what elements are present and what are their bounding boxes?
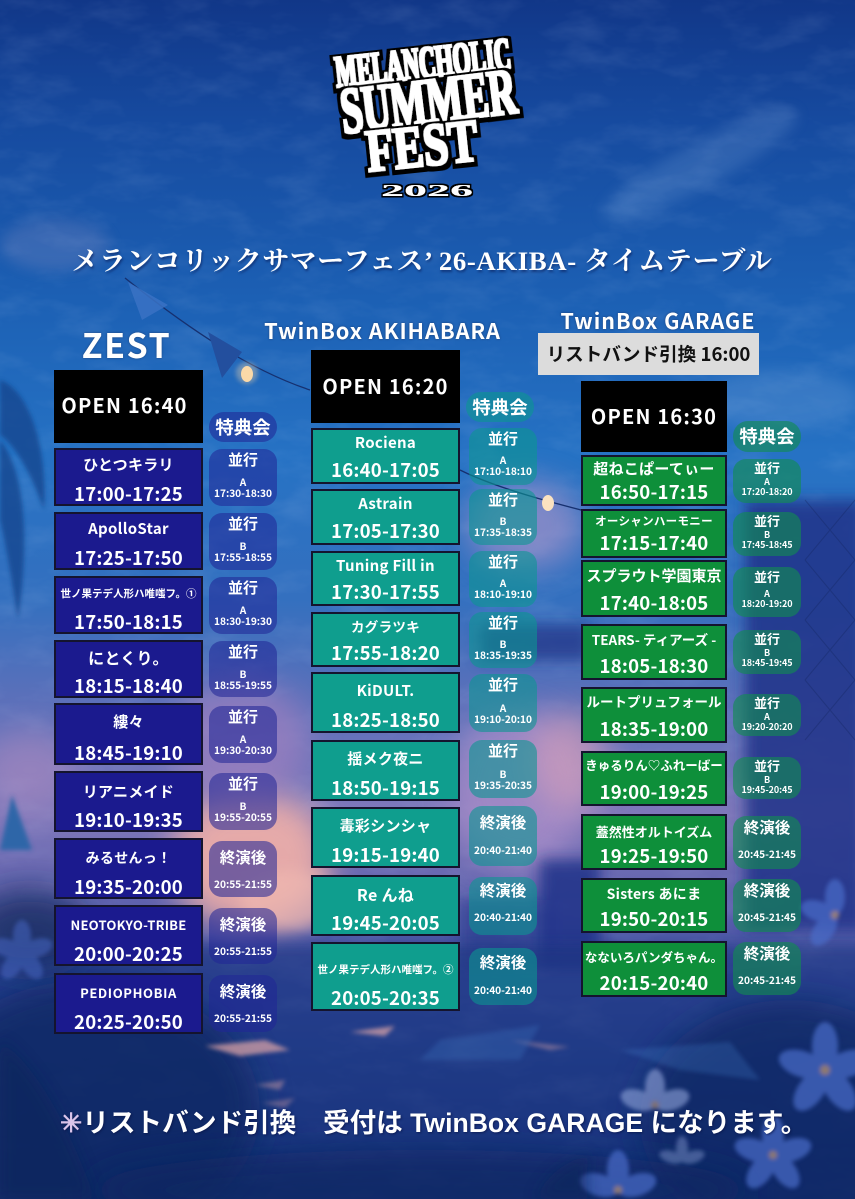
- act: リアニメイド: 19:10-19:35: [74, 806, 183, 833]
- slot: きゅるりん♡ふれーばー benefit: B: [764, 773, 770, 786]
- slot: 毒彩シンシャ benefit: 終演後: [480, 811, 526, 833]
- act: PEDIOPHOBIA: [54, 973, 203, 1034]
- act: Sisters あにま: [581, 878, 727, 933]
- act: Tuning Fill in: 17:30-17:55: [331, 578, 440, 605]
- slot: にとくり。 benefit: 並行: [228, 641, 258, 662]
- ZEST open time: OPEN 16:40: [61, 390, 188, 419]
- slot: スプラウト学園東京 benefit: A: [764, 587, 770, 600]
- act: 超ねこぱーてぃー: [581, 455, 727, 506]
- slot: Re んね benefit: 終演後: [480, 879, 526, 901]
- act: きゅるりん♡ふれーばー: [581, 751, 727, 806]
- slot: ApolloStar benefit: B: [240, 538, 246, 553]
- panel: ZEST timetable: [54, 370, 277, 1035]
- act: 毒彩シンシャ: 毒彩シンシャ: [340, 815, 431, 836]
- dark foliage: [0, 1040, 590, 1199]
- slot: みるせんっ！ benefit: 20:55-21:55: [214, 876, 272, 891]
- palm silhouette: [0, 380, 45, 620]
- act: 世ノ果テデ人形ハ唯嗤フ。①: 17:50-18:15: [74, 608, 183, 635]
- slot: 世ノ果テデ人形ハ唯嗤フ。① benefit: 並行: [228, 577, 258, 598]
- pale clouds: [0, 94, 855, 430]
- slot: TEARS- ティアーズ - benefit: [733, 630, 801, 674]
- slot: なないろパンダちゃん。 benefit: 終演後: [744, 942, 790, 964]
- act: カグラツキ: カグラツキ: [351, 616, 420, 636]
- slot: ApolloStar benefit: 17:55-18:55: [214, 549, 272, 564]
- slot: TEARS- ティアーズ - benefit: 18:45-19:45: [741, 656, 793, 669]
- slot: みるせんっ！ benefit: [209, 841, 277, 897]
- slot: 毒彩シンシャ benefit: [469, 806, 537, 866]
- act: ひとつキラリ: ひとつキラリ: [83, 454, 174, 475]
- act: にとくり。: にとくり。: [88, 645, 169, 669]
- act: Sisters あにま: Sisters あにま: [607, 884, 701, 904]
- slot: ApolloStar benefit: 並行: [228, 513, 258, 534]
- slot: Sisters あにま benefit: 20:45-21:45: [738, 909, 796, 924]
- slot: オーシャンハーモニー benefit: 並行: [754, 511, 780, 530]
- slot: NEOTOKYO-TRIBE benefit: [209, 908, 277, 964]
- slot: Rociena benefit: [469, 428, 537, 485]
- act: NEOTOKYO-TRIBE: NEOTOKYO-TRIBE: [71, 915, 186, 934]
- slot: Re んね benefit: [469, 877, 537, 935]
- act: 毒彩シンシャ: 19:15-19:40: [331, 841, 440, 868]
- string lights and pennants: [125, 278, 640, 525]
- flowers: [0, 879, 855, 1199]
- slot: きゅるりん♡ふれーばー benefit: 並行: [754, 756, 780, 775]
- slot: 世ノ果テデ人形ハ唯嗤フ。② benefit: [469, 948, 537, 1005]
- act: 揺メク夜ニ: 揺メク夜ニ: [347, 748, 424, 769]
- tent: [0, 795, 32, 850]
- slot: Astrain benefit: B: [500, 513, 506, 528]
- slot: 超ねこぱーてぃー benefit: [733, 459, 801, 503]
- slot: NEOTOKYO-TRIBE benefit: 20:55-21:55: [214, 943, 272, 958]
- slot: ひとつキラリ benefit: 並行: [228, 449, 258, 470]
- slot: 蓋然性オルトイズム benefit: 終演後: [744, 816, 790, 838]
- slot: カグラツキ benefit: 並行: [488, 612, 518, 633]
- slot: ApolloStar benefit: [209, 513, 277, 570]
- stage structure: [460, 500, 855, 970]
- slot: オーシャンハーモニー benefit: [733, 512, 801, 556]
- slot: Tuning Fill in benefit: A: [500, 575, 506, 590]
- act: 世ノ果テデ人形ハ唯嗤フ。①: 世ノ果テデ人形ハ唯嗤フ。①: [60, 586, 197, 601]
- slot: 世ノ果テデ人形ハ唯嗤フ。① benefit: [209, 577, 277, 634]
- slot: なないろパンダちゃん。 benefit: 20:45-21:45: [738, 972, 796, 987]
- slot: オーシャンハーモニー benefit: B: [764, 528, 770, 541]
- slot: 超ねこぱーてぃー benefit: 17:20-18:20: [741, 485, 793, 498]
- slot: Astrain benefit: [469, 489, 537, 545]
- AKIHABARA benefit header: 特典会: [472, 394, 528, 420]
- act: 世ノ果テデ人形ハ唯嗤フ。①: [54, 576, 203, 634]
- slot: 超ねこぱーてぃー benefit: A: [764, 475, 770, 488]
- act: Rociena: Rociena: [355, 432, 416, 453]
- slot: にとくり。 benefit: B: [240, 666, 246, 681]
- slot: Astrain benefit: 並行: [488, 489, 518, 510]
- slot: TEARS- ティアーズ - benefit: B: [764, 646, 770, 659]
- act: 超ねこぱーてぃー: 超ねこぱーてぃー: [593, 458, 715, 479]
- act: TEARS- ティアーズ -: [581, 624, 727, 680]
- act: 世ノ果テデ人形ハ唯嗤フ。②: 世ノ果テデ人形ハ唯嗤フ。②: [317, 962, 454, 977]
- act: Re んね: Re んね: [357, 882, 414, 906]
- act: 世ノ果テデ人形ハ唯嗤フ。②: 20:05-20:35: [331, 984, 440, 1011]
- act: 縷々: 18:45-19:10: [74, 739, 183, 766]
- GARAGE benefit header: [733, 421, 801, 452]
- slot: みるせんっ！ benefit: 終演後: [220, 846, 266, 868]
- slot: 揺メク夜ニ benefit: 並行: [488, 740, 518, 761]
- act: ひとつキラリ: 17:00-17:25: [74, 480, 183, 507]
- slot: ルートプリュフォール benefit: A: [764, 710, 770, 723]
- act: ひとつキラリ: [54, 448, 203, 506]
- slot: ひとつキラリ benefit: 17:30-18:30: [214, 485, 272, 500]
- wristband exchange time box: [538, 333, 759, 375]
- slot: ルートプリュフォール benefit: 19:20-20:20: [741, 720, 793, 733]
- act: TEARS- ティアーズ -: TEARS- ティアーズ -: [592, 629, 716, 649]
- act: 蓋然性オルトイズム: [581, 814, 727, 870]
- act: Re んね: 19:45-20:05: [331, 909, 440, 936]
- act: KiDULT.: 18:25-18:50: [331, 706, 440, 733]
- act: Rociena: [311, 428, 460, 484]
- slot: ひとつキラリ benefit: [209, 449, 277, 506]
- act: Sisters あにま: 19:50-20:15: [600, 905, 708, 932]
- act: 縷々: [54, 703, 203, 765]
- act: ApolloStar: ApolloStar: [88, 518, 169, 539]
- act: 世ノ果テデ人形ハ唯嗤フ。②: [311, 942, 460, 1011]
- act: ルートプリュフォール: [581, 687, 727, 743]
- act: スプラウト学園東京: スプラウト学園東京: [586, 565, 722, 586]
- ZEST open time: [54, 370, 203, 443]
- slot: KiDULT. benefit: [469, 674, 537, 732]
- footer note: ✳リストバンド引換 受付は TwinBox GARAGE になります。: [60, 1108, 807, 1138]
- slot: Tuning Fill in benefit: 並行: [488, 551, 518, 572]
- slot: PEDIOPHOBIA benefit: [209, 975, 277, 1032]
- heading: TwinBox GARAGE: TwinBox GARAGE: [561, 305, 755, 336]
- slot: 縷々 benefit: A: [240, 731, 246, 746]
- act: 蓋然性オルトイズム: 蓋然性オルトイズム: [596, 822, 712, 841]
- slot: スプラウト学園東京 benefit: [733, 567, 801, 617]
- slot: きゅるりん♡ふれーばー benefit: 19:45-20:45: [741, 783, 793, 796]
- slot: カグラツキ benefit: [469, 612, 537, 668]
- slot: カグラツキ benefit: 18:35-19:35: [474, 647, 532, 662]
- act: 揺メク夜ニ: [311, 740, 460, 801]
- heading: TwinBox AKIHABARA: TwinBox AKIHABARA: [264, 315, 501, 346]
- logo: FEST: [363, 107, 481, 185]
- slot: カグラツキ benefit: B: [500, 636, 506, 651]
- act: リアニメイド: リアニメイド: [83, 781, 174, 802]
- wristband exchange time box: リストバンド引換 16:00: [547, 340, 750, 367]
- slot: リアニメイド benefit: [209, 773, 277, 830]
- act: Astrain: [311, 489, 460, 545]
- act: ルートプリュフォール: 18:35-19:00: [600, 715, 708, 742]
- slot: 世ノ果テデ人形ハ唯嗤フ。② benefit: 終演後: [480, 951, 526, 973]
- heading: ZEST: ZEST: [82, 319, 171, 368]
- logo: 2026: [381, 181, 473, 200]
- slot: Astrain benefit: 17:35-18:35: [474, 524, 532, 539]
- slot: ルートプリュフォール benefit: 並行: [754, 693, 780, 712]
- panel: TwinBox AKIHABARA timetable: [311, 350, 537, 1011]
- ground: [0, 945, 855, 1199]
- act: ApolloStar: 17:25-17:50: [74, 544, 183, 571]
- act: スプラウト学園東京: 17:40-18:05: [600, 589, 708, 616]
- slot: KiDULT. benefit: A: [500, 700, 506, 715]
- slot: Re んね benefit: 20:40-21:40: [474, 909, 532, 924]
- slot: Tuning Fill in benefit: [469, 551, 537, 607]
- act: オーシャンハーモニー: 17:15-17:40: [600, 529, 708, 556]
- GARAGE benefit header: 特典会: [739, 423, 795, 449]
- slot: PEDIOPHOBIA benefit: 終演後: [220, 980, 266, 1002]
- title: メランコリックサマーフェス’ 26-AKIBA- タイムテーブル: [72, 246, 772, 276]
- act: オーシャンハーモニー: オーシャンハーモニー: [595, 513, 713, 529]
- slot: 超ねこぱーてぃー benefit: 並行: [754, 458, 780, 477]
- act: KiDULT.: KiDULT.: [357, 680, 414, 701]
- act: なないろパンダちゃん。: [581, 941, 727, 997]
- act: スプラウト学園東京: [581, 560, 727, 617]
- act: なないろパンダちゃん。: なないろパンダちゃん。: [585, 947, 723, 966]
- panel: TwinBox GARAGE timetable: [581, 381, 801, 997]
- slot: リアニメイド benefit: 19:55-20:55: [214, 809, 272, 824]
- slot: ルートプリュフォール benefit: [733, 694, 801, 736]
- act: みるせんっ！: [54, 838, 203, 899]
- sunset glow: [170, 790, 330, 930]
- act: カグラツキ: 17:55-18:20: [331, 639, 440, 666]
- act: カグラツキ: [311, 612, 460, 667]
- slot: きゅるりん♡ふれーばー benefit: [733, 757, 801, 799]
- act: 蓋然性オルトイズム: 19:25-19:50: [600, 842, 708, 869]
- slot: 縷々 benefit: [209, 706, 277, 763]
- act: リアニメイド: [54, 771, 203, 832]
- GARAGE open time: OPEN 16:30: [591, 401, 717, 430]
- act: Rociena: 16:40-17:05: [331, 456, 440, 483]
- act: PEDIOPHOBIA: 20:25-20:50: [74, 1008, 183, 1035]
- slot: 蓋然性オルトイズム benefit: 20:45-21:45: [738, 846, 796, 861]
- slot: 縷々 benefit: 並行: [228, 706, 258, 727]
- act: Astrain: Astrain: [358, 493, 413, 514]
- slot: Sisters あにま benefit: [733, 879, 801, 932]
- act: Tuning Fill in: [311, 551, 460, 606]
- act: ルートプリュフォール: ルートプリュフォール: [586, 691, 722, 711]
- act: にとくり。: [54, 640, 203, 698]
- slot: Rociena benefit: 17:10-18:10: [474, 463, 532, 478]
- slot: スプラウト学園東京 benefit: 18:20-19:20: [741, 597, 793, 610]
- slot: オーシャンハーモニー benefit: 17:45-18:45: [741, 538, 793, 551]
- act: PEDIOPHOBIA: PEDIOPHOBIA: [80, 983, 177, 1002]
- act: Astrain: 17:05-17:30: [331, 517, 440, 544]
- pink clouds behind middle column: [465, 480, 585, 570]
- slot: Rociena benefit: 並行: [488, 428, 518, 449]
- slot: KiDULT. benefit: 19:10-20:10: [474, 711, 532, 726]
- slot: 世ノ果テデ人形ハ唯嗤フ。① benefit: A: [240, 602, 246, 617]
- act: ApolloStar: [54, 512, 203, 570]
- wet ground reflections: [205, 1026, 570, 1108]
- slot: Tuning Fill in benefit: 18:10-19:10: [474, 586, 532, 601]
- act: みるせんっ！: みるせんっ！: [86, 848, 171, 868]
- slot: NEOTOKYO-TRIBE benefit: 終演後: [220, 913, 266, 935]
- slot: 揺メク夜ニ benefit: 19:35-20:35: [474, 777, 532, 792]
- act: 超ねこぱーてぃー: 16:50-17:15: [600, 478, 708, 505]
- act: NEOTOKYO-TRIBE: 20:00-20:25: [74, 940, 183, 967]
- slot: にとくり。 benefit: [209, 641, 277, 697]
- slot: Sisters あにま benefit: 終演後: [744, 879, 790, 901]
- GARAGE open time: [581, 381, 727, 452]
- slot: 毒彩シンシャ benefit: 20:40-21:40: [474, 842, 532, 857]
- slot: 世ノ果テデ人形ハ唯嗤フ。② benefit: 20:40-21:40: [474, 982, 532, 997]
- act: 縷々: 縷々: [113, 711, 144, 732]
- slot: 揺メク夜ニ benefit: [469, 740, 537, 798]
- act: なないろパンダちゃん。: 20:15-20:40: [600, 969, 708, 996]
- act: NEOTOKYO-TRIBE: [54, 905, 203, 966]
- slot: 揺メク夜ニ benefit: B: [500, 766, 506, 781]
- act: きゅるりん♡ふれーばー: 19:00-19:25: [600, 778, 708, 805]
- slot: なないろパンダちゃん。 benefit: [733, 942, 801, 995]
- act: Re んね: [311, 875, 460, 936]
- slot: Rociena benefit: A: [500, 452, 506, 467]
- ZEST benefit header: 特典会: [215, 414, 271, 440]
- slot: 縷々 benefit: 19:30-20:30: [214, 742, 272, 757]
- act: にとくり。: 18:15-18:40: [74, 672, 183, 699]
- slot: KiDULT. benefit: 並行: [488, 674, 518, 695]
- slot: PEDIOPHOBIA benefit: 20:55-21:55: [214, 1010, 272, 1025]
- act: 揺メク夜ニ: 18:50-19:15: [331, 774, 440, 801]
- act: Tuning Fill in: Tuning Fill in: [336, 555, 435, 576]
- act: きゅるりん♡ふれーばー: きゅるりん♡ふれーばー: [585, 755, 723, 774]
- slot: にとくり。 benefit: 18:55-19:55: [214, 677, 272, 692]
- act: オーシャンハーモニー: [581, 509, 727, 558]
- slot: ひとつキラリ benefit: A: [240, 474, 246, 489]
- logo: [329, 29, 524, 200]
- act: KiDULT.: [311, 672, 460, 733]
- slot: スプラウト学園東京 benefit: 並行: [754, 567, 780, 586]
- slot: 世ノ果テデ人形ハ唯嗤フ。① benefit: 18:30-19:30: [214, 613, 272, 628]
- AKIHABARA open time: OPEN 16:20: [322, 371, 449, 400]
- AKIHABARA open time: [311, 350, 460, 423]
- slot: TEARS- ティアーズ - benefit: 並行: [754, 629, 780, 648]
- slot: 蓋然性オルトイズム benefit: [733, 816, 801, 869]
- act: TEARS- ティアーズ -: 18:05-18:30: [600, 652, 708, 679]
- act: 毒彩シンシャ: [311, 807, 460, 868]
- act: みるせんっ！: 19:35-20:00: [74, 873, 183, 900]
- slot: リアニメイド benefit: 並行: [228, 773, 258, 794]
- slot: リアニメイド benefit: B: [240, 798, 246, 813]
